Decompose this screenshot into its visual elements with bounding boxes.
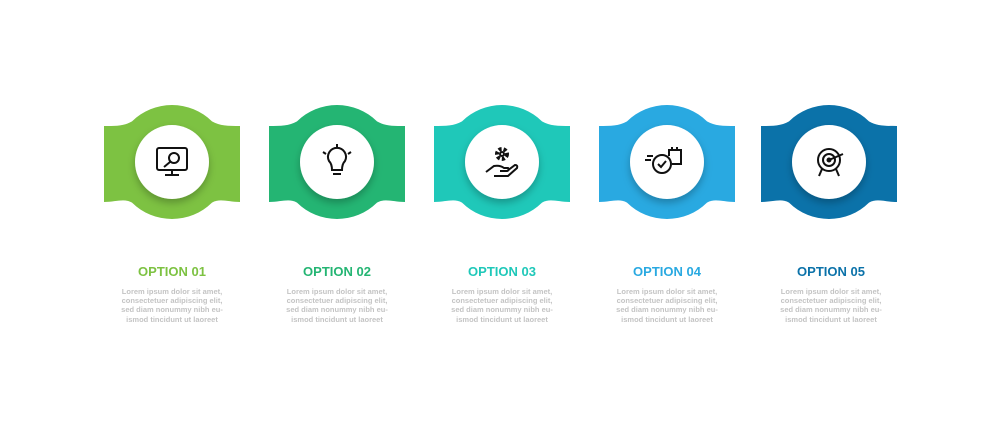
text: option 01: ismod tincidunt ut laoreet [126, 315, 218, 324]
text: option 01: consectetuer adipiscing elit, [122, 296, 222, 305]
option 5 shape [761, 105, 897, 219]
text: option 04: consectetuer adipiscing elit, [617, 296, 717, 305]
icon: light bulb [323, 144, 351, 174]
text: option 04: sed diam nonummy nibh eu- [616, 305, 718, 314]
text: option 03: ismod tincidunt ut laoreet [456, 315, 548, 324]
text: option 02: sed diam nonummy nibh eu- [286, 305, 388, 314]
text: option 04: OPTION 04 [633, 264, 701, 279]
text: option 01: OPTION 01 [138, 264, 206, 279]
text: option 03: Lorem ipsum dolor sit amet, [452, 287, 552, 296]
icon: monitor search [157, 148, 187, 175]
text: option 02: Lorem ipsum dolor sit amet, [287, 287, 387, 296]
text: option 04: ismod tincidunt ut laoreet [621, 315, 713, 324]
text: option 05: consectetuer adipiscing elit, [781, 296, 881, 305]
text: option 05 [780, 264, 882, 324]
text: option 05: OPTION 05 [797, 264, 865, 279]
icon: target [818, 149, 843, 176]
text: option 05: sed diam nonummy nibh eu- [780, 305, 882, 314]
text: option 02: ismod tincidunt ut laoreet [291, 315, 383, 324]
text: option 02: OPTION 02 [303, 264, 371, 279]
text: option 02: consectetuer adipiscing elit, [287, 296, 387, 305]
text: option 01 [121, 264, 223, 324]
text: option 05: ismod tincidunt ut laoreet [785, 315, 877, 324]
text: option 03: OPTION 03 [468, 264, 536, 279]
text: option 04: Lorem ipsum dolor sit amet, [617, 287, 717, 296]
text: option 05: Lorem ipsum dolor sit amet, [781, 287, 881, 296]
text: option 03: sed diam nonummy nibh eu- [451, 305, 553, 314]
text: option 04 [616, 264, 718, 324]
option 4 shape [599, 105, 735, 219]
icon: clock calendar [645, 147, 681, 173]
text: option 03: consectetuer adipiscing elit, [452, 296, 552, 305]
option 1 shape [104, 105, 240, 219]
text: option 01: Lorem ipsum dolor sit amet, [122, 287, 222, 296]
option 2 shape [269, 105, 405, 219]
option 3 shape [434, 105, 570, 219]
text: option 01: sed diam nonummy nibh eu- [121, 305, 223, 314]
text: option 02 [286, 264, 388, 324]
icon: hand gear [486, 149, 517, 176]
text: option 03 [451, 264, 553, 324]
